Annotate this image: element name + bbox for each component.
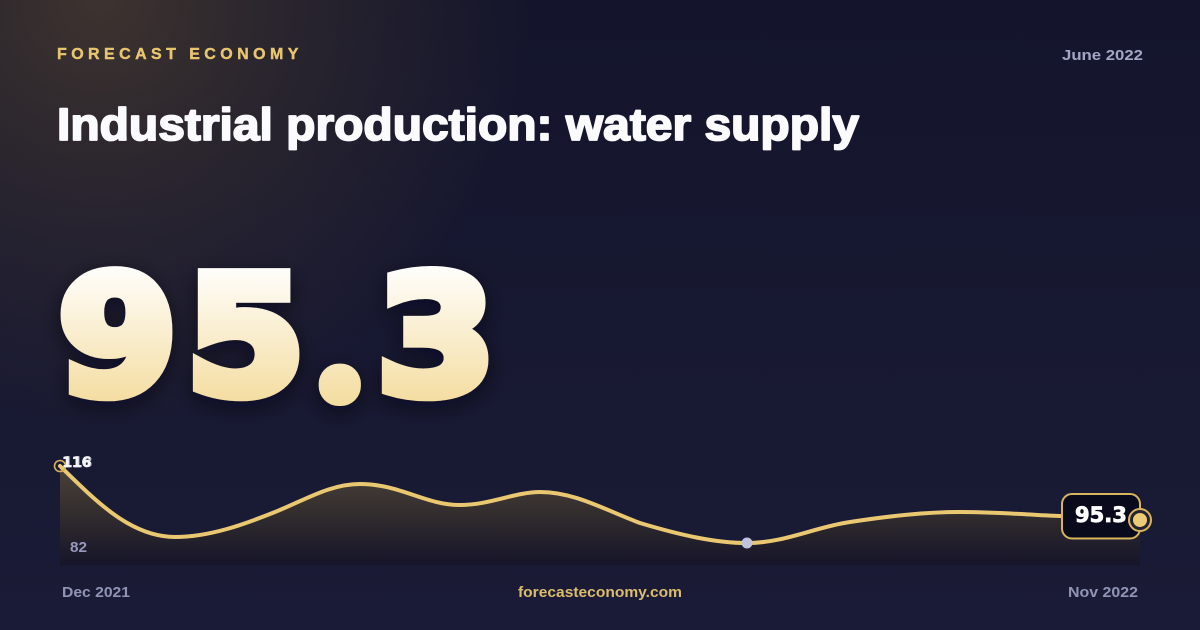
chart: sparkline <box>54 455 1151 565</box>
chart line <box>60 466 1140 543</box>
current value marker <box>1129 509 1151 531</box>
max label: 116 <box>62 455 91 471</box>
low point marker <box>742 538 752 548</box>
big value: . <box>338 375 342 389</box>
start date label: Dec 2021 <box>62 584 130 601</box>
big value: 9 <box>58 243 177 432</box>
current value callout: 95.3 <box>1075 503 1127 527</box>
min label: 82 <box>70 539 87 556</box>
big value: 3 <box>377 243 496 432</box>
end date label: Nov 2022 <box>1068 584 1138 601</box>
current value callout <box>1062 494 1140 538</box>
source url: forecasteconomy.com <box>518 584 682 601</box>
max label: 118 <box>63 455 92 471</box>
date: June 2022 <box>1062 47 1143 64</box>
big value <box>58 243 496 432</box>
brand label: FORECAST ECONOMY <box>57 46 303 63</box>
big value: 5 <box>186 243 305 432</box>
title: Industrial production: water supply <box>57 99 859 150</box>
start marker <box>54 460 66 472</box>
chart area fill <box>60 466 1140 565</box>
